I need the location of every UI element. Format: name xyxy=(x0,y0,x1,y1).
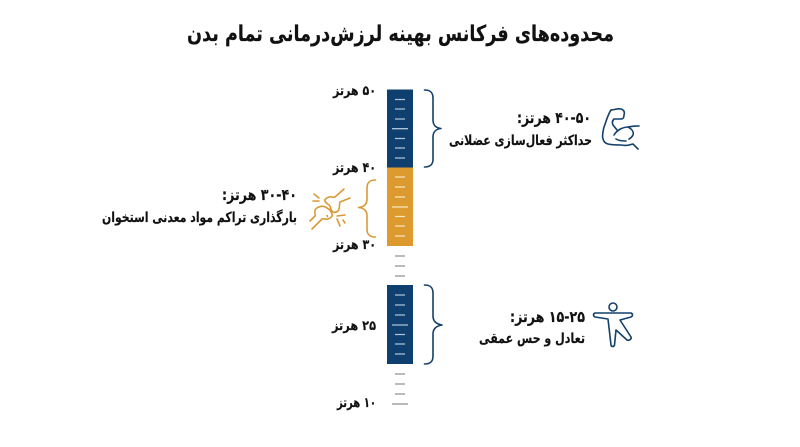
bar: 15-25 Hz xyxy=(387,285,413,364)
callout heading: ۱۵-۲۵ هرتز: xyxy=(510,308,585,326)
tick label: 25 Hz: ۲۵ هرتز xyxy=(331,318,376,334)
tick label: 30 Hz: ۳۰ هرتز xyxy=(332,237,376,253)
icon: balancing figure xyxy=(594,303,632,346)
tick label: 40 Hz: ۴۰ هرتز xyxy=(332,160,376,176)
callout: 40-50 Hz xyxy=(449,109,592,149)
tick label: 10 Hz: ۱۰ هرتز xyxy=(336,395,376,411)
callout description: تعادل و حس عمقی xyxy=(479,331,585,347)
title: محدوده‌های فرکانس بهینه لرزش‌درمانی تمام بدن xyxy=(187,22,614,47)
grey ticks: between 10 and 25 Hz xyxy=(392,374,408,404)
callout description: بارگذاری تراکم مواد معدنی استخوان xyxy=(102,209,297,226)
frequency scale xyxy=(387,90,413,404)
callout: 30-40 Hz xyxy=(102,186,297,226)
icon: flexed arm xyxy=(603,109,639,149)
brace: 30-40 Hz xyxy=(358,180,376,237)
icon: bone joint xyxy=(310,189,350,229)
callout description: حداکثر فعال‌سازی عضلانی xyxy=(449,133,592,149)
brace: 40-50 Hz xyxy=(424,90,441,167)
bar: 30-40 Hz xyxy=(387,168,413,246)
tick label: 50 Hz: ۵۰ هرتز xyxy=(332,83,376,99)
grey ticks: between 25 and 30 Hz xyxy=(395,256,405,276)
callout heading: ۴۰-۵۰ هرتز: xyxy=(517,109,591,127)
callout heading: ۳۰-۴۰ هرتز: xyxy=(222,186,297,204)
brace: 15-25 Hz xyxy=(424,285,442,364)
callout: 15-25 Hz xyxy=(479,308,585,347)
bar: 40-50 Hz xyxy=(387,90,413,168)
